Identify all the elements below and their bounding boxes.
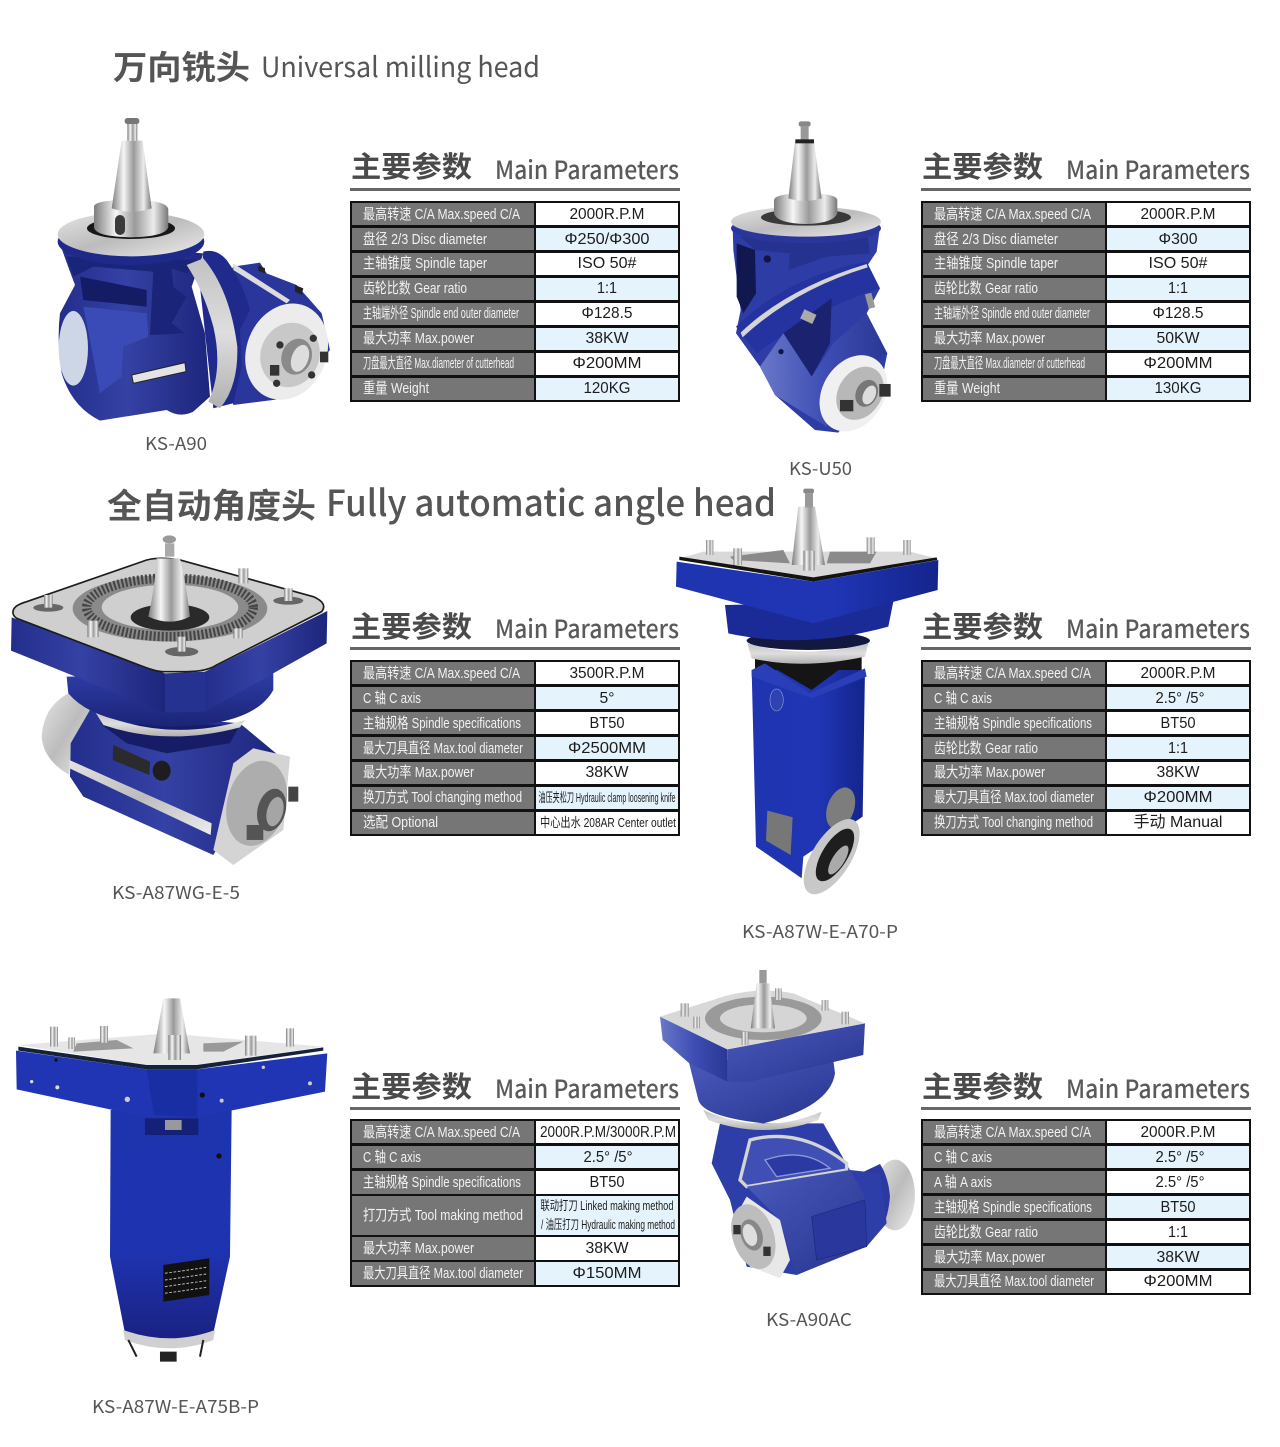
table: KS-U50 parameters: 1:1 [1168, 280, 1188, 297]
table: KS-A87W-E-A75B-P parameters: 最高转速 C/A Max.speed C/A [363, 1124, 520, 1141]
title: Fully automatic angle head: 全自动角度头 [107, 479, 316, 528]
table: KS-A90 parameters: 2000R.P.M [570, 206, 644, 223]
heading: Main Parameters: Main Parameters [1066, 1070, 1250, 1106]
heading: Main Parameters: Main Parameters [495, 610, 679, 646]
heading: Main Parameters: 主要参数 [922, 604, 1043, 646]
table: KS-A87WG-E-5 parameters: 最高转速 C/A Max.speed C/A [363, 665, 520, 682]
table: KS-A90AC parameters: BT50 [1160, 1199, 1196, 1216]
title: Universal milling head [113, 41, 540, 89]
table: KS-A90 parameters: 最高转速 C/A Max.speed C/A [363, 206, 520, 223]
product image: KS-A90AC angle head [660, 970, 915, 1278]
table: KS-A90 parameters: Φ200MM [572, 355, 642, 372]
title: Fully automatic angle head [107, 475, 776, 528]
table: KS-A87WG-E-5 parameters [350, 660, 680, 836]
table: KS-A87W-E-A75B-P parameters: 最大刀具直径 Max.tool diameter [363, 1265, 523, 1282]
table: KS-U50 parameters: 主轴锥度 Spindle taper [934, 255, 1058, 272]
title: Universal milling head: 万向铣头 [113, 41, 250, 89]
table: KS-A87WG-E-5 parameters: 38KW [586, 764, 629, 781]
table: KS-A87W-E-A75B-P parameters: 2.5° /5° [584, 1149, 632, 1166]
table: KS-A90AC parameters: 主轴规格 Spindle specifications [934, 1199, 1092, 1216]
table: KS-A87W-E-A70-P parameters: 1:1 [1168, 740, 1188, 757]
table: KS-U50 parameters: 130KG [1154, 380, 1202, 397]
panel: KS-A90 parameters [350, 144, 680, 402]
table: KS-A87W-E-A75B-P parameters: C 轴 C axis [363, 1149, 421, 1166]
table: KS-U50 parameters: 2000R.P.M [1140, 206, 1216, 223]
table: KS-A87WG-E-5 parameters: 3500R.P.M [570, 665, 644, 682]
table: KS-U50 parameters: 50KW [1156, 330, 1200, 347]
heading: Main Parameters [350, 1064, 680, 1110]
table: KS-A90 parameters: 38KW [586, 330, 629, 347]
heading: Main Parameters [921, 604, 1251, 650]
table: KS-A90AC parameters: 最大刀具直径 Max.tool diameter [934, 1273, 1094, 1290]
table: KS-A87W-E-A70-P parameters: Φ200MM [1144, 789, 1212, 806]
table: KS-A90 parameters: 120KG [584, 380, 630, 397]
panel: KS-A87W-E-A70-P parameters [921, 604, 1251, 836]
table: KS-A87WG-E-5 parameters: 选配 Optional [363, 814, 438, 831]
heading: Main Parameters: 主要参数 [351, 1064, 472, 1106]
table: KS-A87W-E-A70-P parameters: 换刀方式 Tool changing method [934, 814, 1093, 831]
heading: Main Parameters: 主要参数 [351, 144, 472, 186]
table: KS-A90AC parameters: 最高转速 C/A Max.speed C/A [934, 1124, 1091, 1141]
table: KS-A90 parameters: 盘径 2/3 Disc diameter [363, 230, 487, 248]
table: KS-A87WG-E-5 parameters: 中心出水 208AR Center outlet [540, 815, 676, 830]
caption: KS-U50: KS-U50 [789, 455, 852, 481]
table: KS-U50 parameters: 盘径 2/3 Disc diameter [934, 230, 1058, 248]
heading: Main Parameters: 主要参数 [922, 1064, 1043, 1106]
table: KS-A87W-E-A70-P parameters: C 轴 C axis [934, 690, 992, 707]
table: KS-A90AC parameters: C 轴 C axis [934, 1149, 992, 1166]
table: KS-A90AC parameters: 最大功率 Max.power [934, 1249, 1045, 1266]
table: KS-A87W-E-A70-P parameters: 2.5° /5° [1156, 690, 1204, 707]
table: KS-A87W-E-A75B-P parameters: Φ150MM [572, 1265, 642, 1282]
table: KS-A90AC parameters [921, 1119, 1251, 1295]
caption: KS-A90AC: KS-A90AC [766, 1306, 852, 1332]
table: KS-A87W-E-A75B-P parameters: BT50 [590, 1174, 625, 1191]
table: KS-A87W-E-A70-P parameters: 最大刀具直径 Max.tool diameter [934, 789, 1094, 806]
table: KS-A90 parameters: 齿轮比数 Gear ratio [363, 280, 467, 297]
table: KS-A87W-E-A75B-P parameters: 38KW [586, 1240, 629, 1257]
table: KS-U50 parameters: ISO 50# [1148, 255, 1208, 272]
table: KS-A90 parameters: ISO 50# [578, 255, 637, 272]
table: KS-A90 parameters [350, 201, 680, 402]
caption: KS-A87WG-E-5: KS-A87WG-E-5 [112, 879, 240, 905]
caption: KS-A90: KS-A90 [145, 430, 207, 456]
caption: KS-A87W-E-A75B-P: KS-A87W-E-A75B-P [92, 1393, 259, 1419]
product image: KS-A87W-E-A70-P angle head [676, 489, 938, 903]
heading: Main Parameters: Main Parameters [1066, 151, 1250, 187]
heading: Main Parameters [350, 604, 680, 650]
table: KS-A87W-E-A70-P parameters: 齿轮比数 Gear ratio [934, 740, 1038, 757]
caption: KS-A87W-E-A70-P: KS-A87W-E-A70-P [742, 918, 898, 944]
table: KS-A90 parameters: 刀盘最大直径 Max.diameter of cutterhead [363, 354, 514, 372]
table: KS-A90AC parameters: 2.5° /5° [1156, 1149, 1204, 1166]
table: KS-A90AC parameters: A 轴 A axis [934, 1174, 992, 1191]
table: KS-A87W-E-A75B-P parameters: 最大功率 Max.power [363, 1240, 474, 1257]
table: KS-U50 parameters: 重量 Weight [934, 380, 1001, 397]
table: KS-A87W-E-A70-P parameters: 38KW [1156, 764, 1200, 781]
table: KS-U50 parameters: Φ300 [1158, 231, 1198, 248]
table: KS-A87WG-E-5 parameters: 最大功率 Max.power [363, 764, 474, 781]
table: KS-A87W-E-A75B-P parameters: 打刀方式 Tool making method [363, 1207, 523, 1224]
panel: KS-A87W-E-A75B-P parameters [350, 1064, 680, 1287]
panel: KS-A87WG-E-5 parameters [350, 604, 680, 836]
table: KS-A87W-E-A75B-P parameters: / 油压打刀 Hydraulic making method [541, 1217, 675, 1232]
table: KS-A87W-E-A70-P parameters: 最大功率 Max.power [934, 764, 1045, 781]
heading: Main Parameters: 主要参数 [351, 604, 472, 646]
table: KS-A87W-E-A75B-P parameters [350, 1119, 680, 1287]
panel: KS-A90AC parameters [921, 1064, 1251, 1295]
table: KS-U50 parameters: 齿轮比数 Gear ratio [934, 280, 1038, 297]
table: KS-A90AC parameters: 2.5° /5° [1156, 1174, 1204, 1191]
table: KS-A87W-E-A70-P parameters: 手动 Manual [1134, 813, 1222, 831]
table: KS-A90 parameters: Φ250/Φ300 [564, 231, 650, 248]
table: KS-A87W-E-A70-P parameters: BT50 [1160, 715, 1196, 732]
table: KS-U50 parameters [921, 201, 1251, 402]
table: KS-A90 parameters: 主轴端外径 Spindle end outer diameter [363, 305, 519, 322]
table: KS-A87W-E-A75B-P parameters: 2000R.P.M/3000R.P.M [540, 1124, 676, 1141]
table: KS-A87WG-E-5 parameters: C 轴 C axis [363, 690, 421, 707]
product image: KS-A87WG-E-5 angle head [11, 535, 327, 865]
table: KS-A87WG-E-5 parameters: 主轴规格 Spindle specifications [363, 715, 521, 732]
panel: KS-U50 parameters [921, 144, 1251, 402]
table: KS-A87WG-E-5 parameters: Φ2500MM [568, 740, 646, 757]
table: KS-U50 parameters: 刀盘最大直径 Max.diameter of cutterhead [934, 354, 1085, 372]
heading: Main Parameters [921, 1064, 1251, 1110]
heading: Main Parameters: Main Parameters [1066, 610, 1250, 646]
title: Universal milling head: Universal milling head [261, 46, 540, 86]
table: KS-A87W-E-A70-P parameters [921, 660, 1251, 836]
table: KS-A87WG-E-5 parameters: 换刀方式 Tool changing method [363, 789, 522, 806]
table: KS-U50 parameters: 最高转速 C/A Max.speed C/A [934, 206, 1091, 223]
table: KS-A90 parameters: 最大功率 Max.power [363, 330, 474, 347]
table: KS-A87WG-E-5 parameters: BT50 [590, 715, 625, 732]
table: KS-A90AC parameters: 齿轮比数 Gear ratio [934, 1224, 1038, 1241]
table: KS-A90 parameters: Φ128.5 [582, 305, 633, 322]
heading: Main Parameters: 主要参数 [922, 144, 1043, 186]
table: KS-U50 parameters: 最大功率 Max.power [934, 330, 1045, 347]
title: Fully automatic angle head: Fully automatic angle head [326, 475, 776, 527]
table: KS-U50 parameters: Φ128.5 [1152, 305, 1204, 322]
table: KS-A90 parameters: 主轴锥度 Spindle taper [363, 255, 487, 272]
product image: KS-A87W-E-A75B-P angle head [16, 998, 327, 1362]
product image: KS-A90 milling head [58, 118, 342, 421]
table: KS-A90 parameters: 1:1 [597, 280, 617, 297]
table: KS-A87WG-E-5 parameters: 5° [600, 690, 614, 707]
heading: Main Parameters: Main Parameters [495, 1070, 679, 1106]
table: KS-U50 parameters: Φ200MM [1144, 355, 1212, 372]
table: KS-A87W-E-A70-P parameters: 主轴规格 Spindle specifications [934, 715, 1092, 732]
heading: Main Parameters [921, 144, 1251, 191]
table: KS-A90AC parameters: Φ200MM [1144, 1273, 1212, 1290]
table: KS-A90 parameters: 重量 Weight [363, 380, 430, 397]
table: KS-A87W-E-A75B-P parameters: 主轴规格 Spindle specifications [363, 1174, 521, 1191]
table: KS-A87W-E-A70-P parameters: 2000R.P.M [1140, 665, 1216, 682]
table: KS-A87WG-E-5 parameters: 最大刀具直径 Max.tool diameter [363, 740, 523, 757]
table: KS-A90AC parameters: 2000R.P.M [1140, 1124, 1216, 1141]
table: KS-A87WG-E-5 parameters: 油压夹松刀 Hydraulic clamp loosening knife [538, 790, 676, 805]
heading: Main Parameters: Main Parameters [495, 151, 679, 187]
heading: Main Parameters [350, 144, 680, 191]
table: KS-A87W-E-A75B-P parameters: 联动打刀 Linked making method [540, 1198, 674, 1213]
table: KS-U50 parameters: 主轴端外径 Spindle end outer diameter [934, 305, 1090, 322]
table: KS-A87W-E-A70-P parameters: 最高转速 C/A Max.speed C/A [934, 665, 1091, 682]
table: KS-A90AC parameters: 38KW [1156, 1249, 1200, 1266]
product image: KS-U50 milling head [731, 121, 901, 444]
table: KS-A90AC parameters: 1:1 [1168, 1224, 1188, 1241]
